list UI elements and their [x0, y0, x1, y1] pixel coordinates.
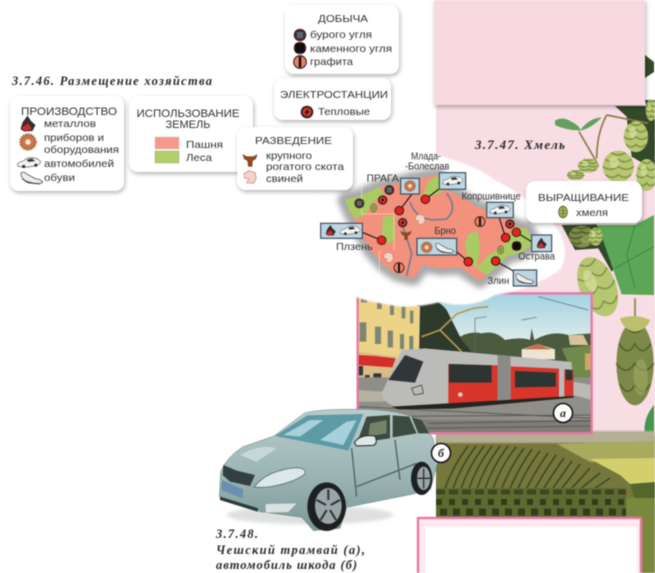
panel: livestock legend: РАЗВЕДЕНИЕ [255, 135, 332, 147]
panel: land use legend: Леса [186, 152, 212, 164]
mirror [354, 436, 376, 446]
leaf lower right [645, 405, 654, 445]
side windows [357, 415, 429, 443]
city labels: Острава [518, 251, 555, 262]
panel: production legend: оборудования [44, 144, 119, 156]
caption: figure 3.7.48: 3.7.48. [215, 527, 258, 541]
panel: power stations legend: ЭЛЕКТРОСТАНЦИИ [280, 89, 388, 101]
title: figure 3.7.47: 3.7.47. Хмель [474, 137, 565, 152]
rear wheel [411, 462, 432, 495]
photo: Czech tram [358, 293, 592, 434]
dark leaf tip [645, 55, 654, 78]
panel: production legend: ПРОИЗВОДСТВО [21, 106, 117, 118]
tram body [382, 348, 574, 407]
panel: mining legend [285, 5, 399, 74]
caption: figure 3.7.48: автомобиль шкода (б) [216, 558, 357, 572]
caption: figure 3.7.48: Чешский трамвай (а), [216, 543, 365, 557]
panel: hop growing legend [526, 181, 642, 223]
panel: land use legend: ЗЕМЕЛЬ [166, 119, 210, 131]
panel: production legend: автомобилей [44, 158, 114, 170]
badge: b: б [438, 446, 445, 460]
hood highlight [240, 447, 277, 462]
panel: livestock legend: рогатого скота [266, 161, 344, 173]
panel: livestock legend: крупного [266, 150, 312, 162]
production box: metal and car, Plzen [321, 223, 362, 238]
city labels: ПРАГА [367, 174, 399, 185]
photo: hop field [436, 431, 655, 573]
panel: power stations legend: Тепловые [318, 106, 370, 118]
panel: production legend: приборов и [44, 132, 104, 144]
rivers [403, 193, 452, 276]
production box: gear, Prague [401, 178, 419, 194]
panel: production legend: металлов [44, 118, 96, 130]
production box: shoe, Zlin [513, 270, 537, 286]
photo: hop plant [555, 55, 655, 445]
lower cone [632, 298, 638, 317]
gray halo [345, 175, 534, 281]
panel: production legend [10, 96, 124, 191]
badge: a [554, 404, 572, 422]
upper leaf [555, 117, 602, 131]
title: figure 3.7.46: 3.7.46. Размещение хозяйства [11, 74, 212, 88]
front wheel [307, 482, 346, 531]
map of Czech Republic [321, 151, 555, 287]
panel: mining legend: графита [310, 56, 353, 68]
production box: gear and shoe, Brno [417, 238, 457, 255]
yellow building [358, 297, 421, 361]
production box: metal, Ostrava [532, 235, 552, 252]
city labels: Плзень [336, 242, 373, 253]
big leaf [598, 215, 654, 295]
panel: livestock legend: свиней [266, 173, 303, 185]
country land: arable [345, 175, 534, 281]
pink page background [436, 105, 655, 445]
city labels: -Болеслав [405, 161, 449, 172]
city labels: Брно [434, 226, 456, 237]
panel: mining legend: ДОБЫЧА [318, 13, 368, 25]
dark foliage upper [615, 100, 655, 170]
city labels: Копршивнице [462, 191, 521, 202]
map cloud background [300, 146, 565, 307]
tree line [460, 328, 592, 378]
panel: production legend: обуви [44, 172, 75, 184]
dark trees [417, 300, 472, 352]
production box: car, Mlada Boleslav [439, 173, 466, 189]
grille [223, 465, 255, 486]
panel: mining legend: бурого угля [310, 29, 372, 41]
panel: land use legend: Пашня [186, 139, 223, 151]
stems [579, 115, 648, 165]
top pink block [434, 0, 645, 105]
city labels: Млада- [411, 151, 441, 162]
panel: mining legend: каменного угля [310, 43, 392, 55]
pantograph [422, 307, 488, 352]
badge: a: а [560, 406, 566, 420]
headlight [254, 468, 305, 487]
city labels [336, 151, 555, 287]
panel: hop growing legend: хмеля [576, 207, 608, 219]
panel: hop growing legend: ВЫРАЩИВАНИЕ [538, 192, 629, 204]
resource and agriculture icons [354, 185, 522, 273]
panel: land use legend: ИСПОЛЬЗОВАНИЕ [136, 108, 240, 120]
city labels: Злин [487, 276, 509, 287]
road [358, 376, 591, 421]
production box: car, Koprivnice [487, 202, 513, 218]
industrial centre dots [377, 195, 521, 266]
door lines [352, 440, 417, 497]
windshield [275, 414, 363, 451]
panel: power stations legend [274, 78, 391, 120]
licence plate [221, 480, 243, 499]
forests [345, 175, 534, 275]
photo: Skoda car [219, 409, 437, 531]
caption: figure 3.7.48 [215, 527, 365, 572]
badge: b [432, 444, 450, 462]
dark foliage lower [562, 224, 618, 272]
empty framed text box [418, 518, 641, 573]
panel: land use legend [129, 96, 253, 172]
leader lines [357, 183, 540, 277]
panel: livestock legend [237, 127, 353, 190]
